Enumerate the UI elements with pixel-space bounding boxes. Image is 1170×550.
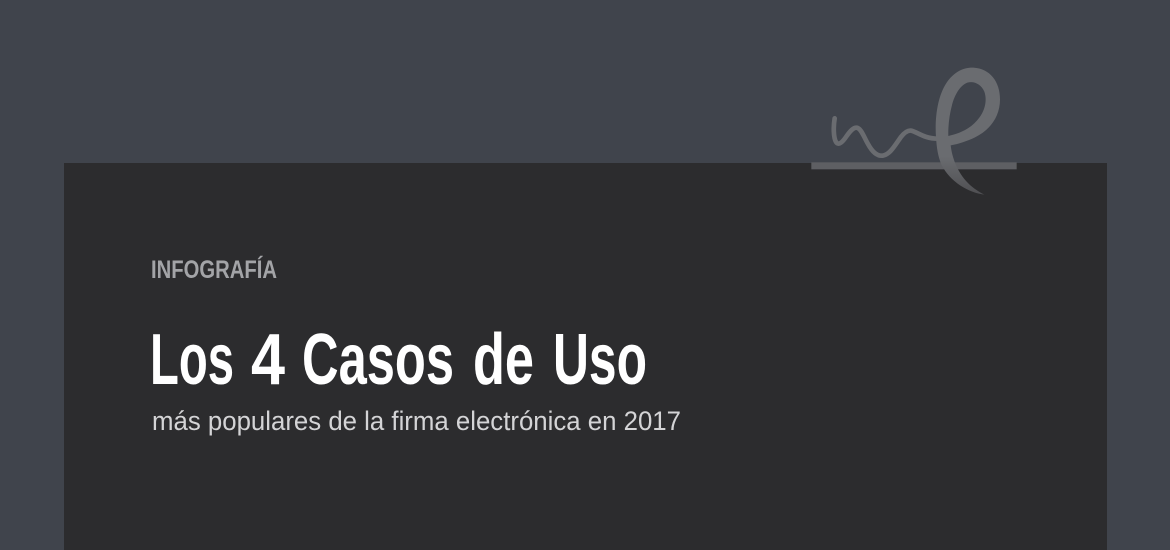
title: 4 — [251, 320, 285, 400]
title: Uso — [553, 320, 647, 400]
eyebrow label: INFOGRAFÍA — [151, 255, 277, 284]
title: de — [473, 320, 534, 400]
title: Los — [150, 320, 234, 400]
title — [150, 320, 647, 400]
dark panel — [64, 163, 1107, 550]
icon: signature on a line — [811, 68, 1017, 195]
subtitle: más populares de la firma electrónica en 2017 — [152, 406, 681, 436]
title: Casos — [302, 320, 454, 400]
